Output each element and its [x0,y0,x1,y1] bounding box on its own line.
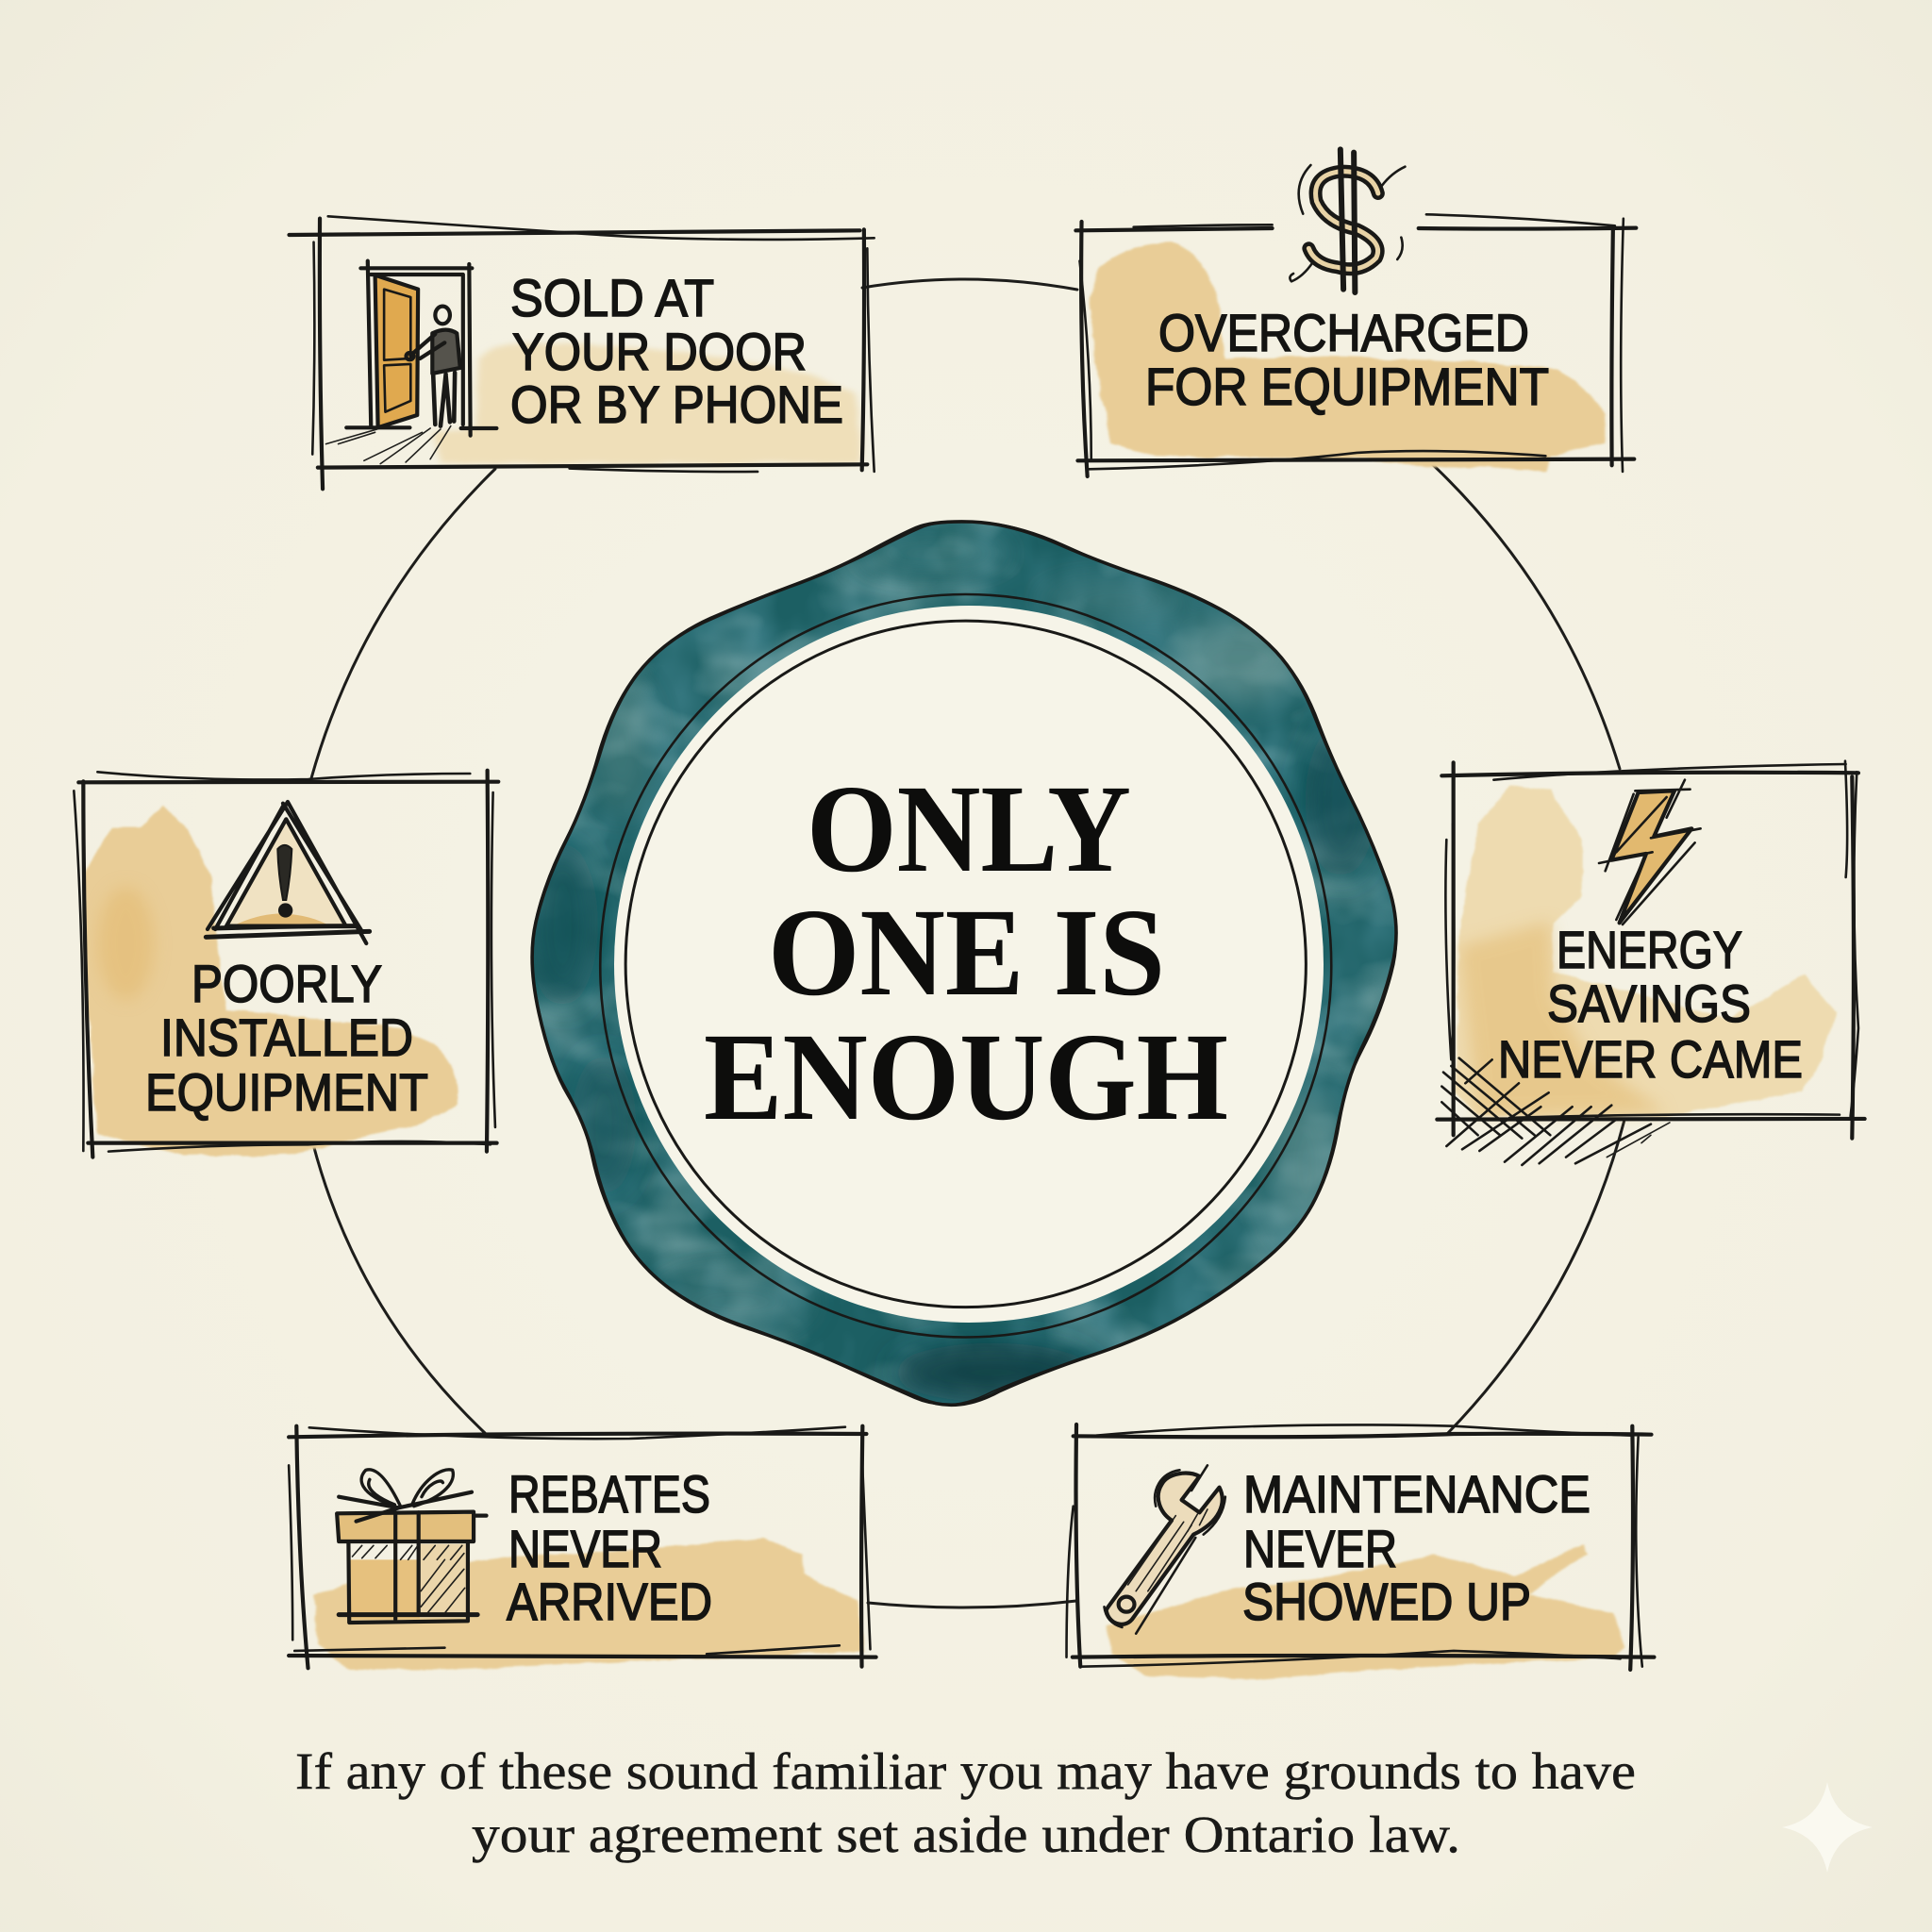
label: SHOWED UP [1242,1572,1531,1631]
label [145,954,428,1122]
seal title: ENOUGH [704,1007,1228,1146]
label: MAINTENANCE [1243,1464,1591,1524]
footer text: your agreement set aside under Ontario law. [472,1806,1460,1863]
label [1145,303,1549,416]
wash [1090,242,1607,470]
wash [434,342,862,464]
icon: open door with person [326,261,496,464]
label: EQUIPMENT [145,1062,428,1122]
label: NEVER [508,1519,662,1578]
panel: energy savings never came [1437,761,1865,1165]
panel: overcharged for equipment [1075,149,1636,476]
icon: lightning bolt [1599,780,1701,924]
label: NEVER [1243,1519,1397,1578]
panel: poorly installed equipment [74,771,498,1158]
label: NEVER CAME [1498,1029,1803,1089]
label [1242,1464,1591,1631]
frame [1067,1424,1654,1670]
frame [1075,214,1636,476]
label [510,268,843,434]
wash [83,805,458,1156]
seal inner disc [614,606,1324,1323]
label: SOLD AT [510,268,714,327]
seal watercolor band [534,523,1394,1404]
wash [1456,786,1837,1116]
label [507,1464,712,1631]
icon: warning triangle [206,802,370,943]
label: INSTALLED [160,1008,413,1067]
frame [290,216,874,489]
footer text [295,1742,1636,1863]
connecting ring lines [311,279,1624,1607]
label: SAVINGS [1547,974,1751,1033]
frame [74,771,498,1158]
icon: gift box [337,1470,487,1623]
label: OR BY PHONE [510,375,843,434]
icon: dollar sign [1290,149,1405,292]
label: ENERGY [1557,920,1742,979]
icon: sparkle watermark [1782,1782,1873,1873]
wash [1107,1544,1624,1679]
seal title: ONLY [807,758,1131,898]
frame [1437,761,1865,1139]
wash [314,1538,864,1670]
label: OVERCHARGED [1158,303,1529,362]
label: POORLY [192,954,382,1013]
footer text: If any of these sound familiar you may have grounds to have [295,1742,1636,1800]
panel: maintenance never showed up [1067,1424,1654,1679]
label: ARRIVED [507,1572,712,1631]
label: REBATES [508,1464,710,1524]
central seal [509,500,1429,1420]
label: FOR EQUIPMENT [1145,357,1549,416]
icon: wrench [1105,1465,1225,1634]
hatching [1441,1058,1670,1165]
label: YOUR DOOR [512,322,807,381]
label [1498,920,1803,1089]
panel: sold at your door [290,216,874,489]
seal title [704,758,1228,1146]
seal sketch outlines [525,514,1404,1412]
seal title: ONE IS [768,882,1165,1022]
frame [289,1426,876,1668]
panel: rebates never arrived [289,1426,876,1670]
